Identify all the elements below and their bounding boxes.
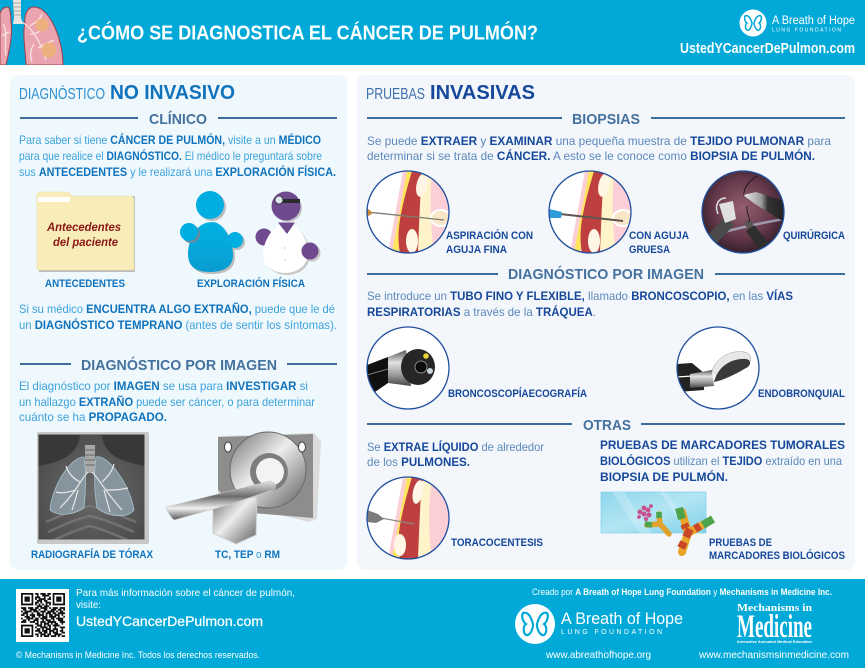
text: clínico intro: sus ANTECEDENTES y le realizará una EXPLORACIÓN FÍSICA.	[19, 164, 336, 179]
heading: biopsias: BIOPSIAS	[572, 111, 640, 128]
illustration: thoracentesis	[367, 477, 449, 559]
text: clínico intro: Para saber si tiene CÁNCER DE PULMÓN, visite a un MÉDICO	[19, 132, 321, 147]
text: diagnóstico por imagen: cuánto se ha PROPAGADO.	[19, 410, 167, 424]
text: más información	[76, 587, 295, 611]
label: aspiración con aguja fina: AGUJA FINA	[446, 244, 507, 256]
logo: A Breath of Hope: A Breath of Hope	[772, 15, 855, 27]
panel: diagnóstico no invasivo	[10, 75, 347, 570]
label: aspiración con aguja fina	[446, 229, 533, 256]
footer url: UstedYCancerDePulmon.com	[76, 613, 263, 629]
label: radiografía de tórax: RADIOGRAFÍA DE TÓRAX	[31, 548, 154, 561]
heading: otras: OTRAS	[583, 417, 631, 434]
credits: Creado por A Breath of Hope Lung Foundation y Mechanisms in Medicine Inc.	[532, 587, 832, 598]
illustration: biomarker slide and antibodies	[601, 492, 713, 552]
label: antecedentes: ANTECEDENTES	[45, 278, 125, 290]
icon: patient folder	[37, 192, 135, 272]
heading: clínico: CLÍNICO	[149, 111, 207, 128]
label: tc, tep o rm: TC, TEP o RM	[215, 549, 280, 561]
label: pruebas de marcadores biológicos: MARCADORES BIOLÓGICOS	[709, 549, 845, 562]
logo: Mechanisms in Medicine: Interactive Animated Medical Education	[737, 639, 813, 644]
panel: pruebas invasivas	[357, 75, 855, 570]
label: endobronquial: ENDOBRONQUIAL	[758, 388, 845, 400]
logo: A Breath of Hope	[740, 10, 855, 36]
label: quirúrgica: QUIRÚRGICA	[783, 229, 845, 242]
label: con aguja gruesa: GRUESA	[629, 244, 670, 256]
label: aspiración con aguja fina: ASPIRACIÓN CON	[446, 229, 533, 242]
text: biopsias	[367, 134, 831, 163]
link: mechanismsinmedicine.com: www.mechanismsinmedicine.com	[698, 649, 849, 661]
text: marcadores tumorales: BIOLÓGICOS utilizan el TEJIDO extraído en una	[600, 453, 842, 468]
illustration: endobronchial ultrasound	[677, 327, 759, 409]
text: encuentra algo extraño: un DIAGNÓSTICO TEMPRANO (antes de sentir los síntomas).	[19, 317, 337, 332]
copyright: © Mechanisms in Medicine Inc. Todos los derechos reservados.	[16, 650, 260, 660]
panel heading: invasivas: PRUEBAS	[366, 86, 425, 103]
text: broncoscopio: RESPIRATORIAS a través de la TRÁQUEA.	[367, 304, 596, 319]
text: más información: Para más información sobre el cáncer de pulmón,	[76, 587, 295, 599]
text: encuentra algo extraño: Si su médico ENCUENTRA ALGO EXTRAÑO, puede que le dé	[19, 301, 335, 316]
image: ct scanner	[166, 432, 321, 544]
illustration: core needle biopsy	[549, 171, 633, 253]
logo: Mechanisms in Medicine: Mechanisms in	[737, 602, 812, 614]
label: toracocentesis: TORACOCENTESIS	[451, 537, 543, 549]
icon: patient folder: del paciente	[53, 237, 119, 249]
header banner	[0, 0, 865, 65]
qr code	[16, 589, 69, 642]
text: broncoscopio	[367, 288, 793, 319]
title: ¿CÓMO SE DIAGNOSTICA EL CÁNCER DE PULMÓN?	[77, 20, 538, 44]
text: más información: visite:	[76, 599, 101, 611]
footer banner	[0, 579, 865, 668]
text: encuentra algo extraño	[19, 301, 337, 332]
logo: A Breath of Hope: LUNG FOUNDATION	[772, 28, 841, 34]
text: marcadores tumorales: BIOPSIA DE PULMÓN.	[600, 469, 728, 484]
text: diagnóstico por imagen: El diagnóstico por IMAGEN se usa para INVESTIGAR si	[19, 379, 308, 393]
icon: patient folder: Antecedentes	[46, 222, 121, 234]
label: con aguja gruesa: CON AGUJA	[629, 230, 689, 242]
text: broncoscopio: Se introduce un TUBO FINO Y FLEXIBLE, llamado BRONCOSCOPIO, en las VÍAS	[367, 288, 793, 303]
illustration: fine needle aspiration	[367, 171, 451, 253]
panel heading: no invasivo: DIAGNÓSTICO	[19, 86, 105, 103]
label: con aguja gruesa	[629, 230, 689, 256]
text: clínico intro	[19, 132, 336, 179]
icon: doctor	[256, 192, 320, 275]
text: extrae líquido	[367, 439, 544, 469]
text: marcadores tumorales: PRUEBAS DE MARCADORES TUMORALES	[600, 438, 845, 452]
logo: A Breath of Hope large	[515, 604, 683, 644]
icon: patient	[180, 191, 245, 274]
image: chest x-ray	[37, 432, 149, 544]
text: diagnóstico por imagen	[19, 379, 315, 424]
logo: Mechanisms in Medicine	[737, 602, 813, 645]
illustration: bronchoscope	[367, 327, 449, 409]
logo: A Breath of Hope large: A Breath of Hope	[561, 609, 683, 628]
label: pruebas de marcadores biológicos: PRUEBAS DE	[709, 537, 772, 549]
link: abreathofhope.org: www.abreathofhope.org	[545, 649, 651, 661]
panel heading: no invasivo: NO INVASIVO	[110, 82, 235, 104]
logo: Mechanisms in Medicine: Medicine	[737, 609, 812, 645]
text: biopsias: determinar si se trata de CÁNCER. A esto se le conoce como BIOPSIA DE PULMÓN.	[367, 148, 815, 163]
text: extrae líquido: de los PULMONES.	[367, 455, 470, 469]
illustration: surgical biopsy	[702, 171, 784, 253]
text: biopsias: Se puede EXTRAER y EXAMINAR una pequeña muestra de TEJIDO PULMONAR para	[367, 134, 831, 148]
panel heading: invasivas: INVASIVAS	[430, 82, 535, 104]
logo: A Breath of Hope large: LUNG FOUNDATION	[561, 629, 662, 636]
heading: diagnóstico por imagen: DIAGNÓSTICO POR IMAGEN	[81, 356, 277, 374]
label: pruebas de marcadores biológicos	[709, 537, 845, 562]
illustration: lungs	[0, 0, 63, 65]
label: broncoscopía ecografía: BRONCOSCOPÍAECOGRAFÍA	[448, 387, 587, 400]
heading: diagnóstico por imagen: DIAGNÓSTICO POR IMAGEN	[508, 265, 704, 283]
text: extrae líquido: Se EXTRAE LÍQUIDO de alrededor	[367, 439, 544, 454]
text: marcadores tumorales	[600, 438, 845, 484]
text: clínico intro: para que realice el DIAGNÓSTICO. El médico le preguntará sobre	[19, 148, 322, 163]
text: diagnóstico por imagen: un hallazgo EXTRAÑO puede ser cáncer, o para determinar	[19, 394, 315, 409]
label: exploración física: EXPLORACIÓN FÍSICA	[197, 277, 305, 290]
